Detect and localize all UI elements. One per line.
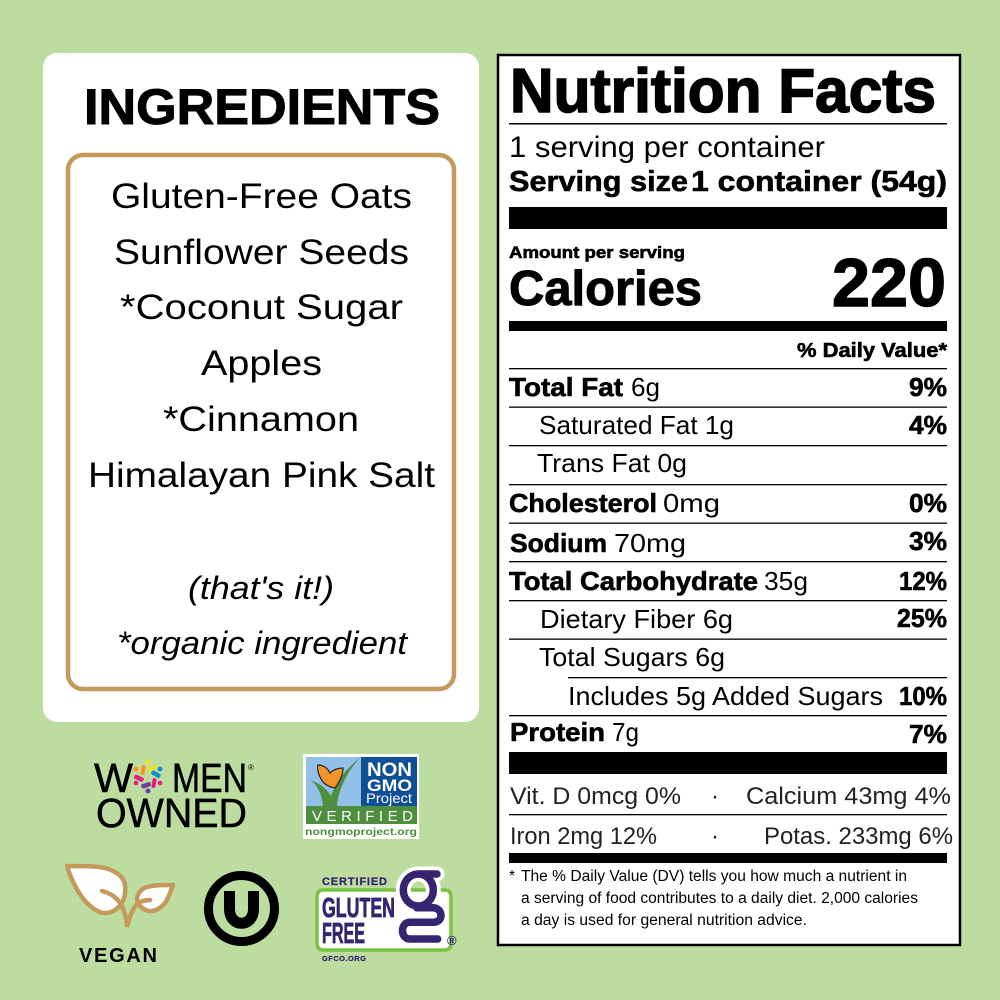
badge: non gmo project verified: GMO — [367, 776, 412, 795]
vitamins and minerals: Vit. D 0mcg 0% — [510, 783, 681, 810]
ingredient list: *Coconut Sugar — [120, 288, 403, 327]
badge: vegan: VEGAN — [79, 945, 157, 967]
row: total fat: Total Fat — [509, 372, 623, 402]
row: sodium: 3% — [909, 526, 947, 556]
ingredient list — [88, 177, 435, 495]
vitamins and minerals: · — [711, 783, 719, 810]
ingredients box — [68, 155, 454, 689]
footnote: * — [509, 868, 515, 885]
servings info — [509, 131, 947, 198]
row: total carbohydrate: 35g — [764, 566, 808, 596]
badge: kosher U — [208, 876, 274, 942]
servings info: Serving size — [509, 166, 688, 198]
badge: non gmo project verified: NON — [367, 760, 412, 781]
servings info: 1 serving per container — [509, 131, 825, 164]
row: saturated fat — [539, 410, 947, 440]
row: cholesterol — [509, 488, 947, 518]
badge: women owned: OWNED — [96, 790, 247, 836]
row: trans fat: Trans Fat 0g — [537, 448, 687, 478]
vitamins and minerals: Iron 2mg 12% — [510, 823, 657, 850]
calories — [509, 243, 946, 321]
footnote: a serving of food contributes to a daily diet. 2,000 calories — [521, 890, 918, 907]
icon: g logo — [402, 874, 441, 939]
row: sodium: 70mg — [614, 528, 686, 558]
badge: vegan — [67, 866, 173, 967]
badge: certified gluten free: CERTIFIED — [322, 876, 387, 888]
ingredient list: Sunflower Seeds — [114, 233, 409, 272]
vitamins and minerals: Calcium 43mg 4% — [746, 783, 951, 810]
row: total carbohydrate: Total Carbohydrate — [509, 566, 758, 596]
footnote: The % Daily Value (DV) tells you how much a nutrient in — [521, 868, 907, 885]
heading: ingredients: INGREDIENTS — [84, 79, 440, 135]
badge: non gmo project verified: nongmoproject.org — [305, 826, 417, 838]
row: total fat: 6g — [631, 372, 660, 402]
calories: Amount per serving — [509, 243, 685, 262]
row: total fat: 9% — [909, 372, 947, 402]
row: protein: Protein — [510, 717, 605, 747]
row: added sugars: 10% — [899, 681, 947, 711]
row: dietary fiber: Dietary Fiber 6g — [540, 604, 733, 634]
badge: certified gluten free — [317, 874, 457, 963]
badge: women owned: ® — [248, 763, 254, 772]
badge: women owned: W — [94, 755, 133, 801]
calories: 220 — [832, 245, 946, 321]
row: protein — [510, 717, 947, 749]
row: total carbohydrate: 12% — [899, 566, 947, 596]
ingredient list: Gluten-Free Oats — [111, 177, 412, 216]
ingredient list: *Cinnamon — [163, 400, 359, 439]
row: total carbohydrate — [509, 566, 947, 596]
row: sodium — [510, 526, 947, 558]
footnote — [509, 868, 918, 929]
row: added sugars: Includes 5g Added Sugars — [568, 681, 883, 711]
vitamins and minerals — [509, 783, 953, 850]
row: sodium: Sodium — [510, 528, 607, 558]
calories: Calories — [509, 262, 702, 316]
servings info: 1 container (54g) — [691, 166, 947, 198]
panel: nutrition facts — [498, 55, 960, 945]
daily value header: % Daily Value* — [797, 340, 947, 362]
badge: non gmo project verified: Project — [366, 790, 412, 806]
badge: non gmo project verified: VERIFIED — [312, 808, 413, 825]
vitamins and minerals: Potas. 233mg 6% — [764, 823, 953, 850]
row: protein: 7% — [909, 719, 947, 749]
ingredient list: Apples — [201, 344, 322, 383]
panel: ingredients — [43, 53, 479, 722]
ingredient list: Himalayan Pink Salt — [88, 456, 435, 495]
row: dietary fiber: 25% — [897, 603, 947, 633]
badge: certified gluten free: FREE — [322, 918, 365, 950]
badge: women owned: MEN — [172, 755, 247, 801]
row: cholesterol: 0mg — [663, 488, 720, 518]
row: saturated fat: Saturated Fat 1g — [539, 410, 734, 440]
badge: certified gluten free: ® — [447, 933, 457, 948]
row: dietary fiber — [540, 603, 947, 634]
row: total sugars: Total Sugars 6g — [539, 642, 725, 672]
badge: non gmo project verified — [303, 754, 419, 839]
row: total fat — [509, 372, 947, 402]
row: protein: 7g — [612, 717, 639, 747]
vitamins and minerals: · — [711, 823, 719, 850]
row: cholesterol: 0% — [909, 488, 947, 518]
footnote: a day is used for general nutrition advice. — [521, 912, 807, 929]
row: cholesterol: Cholesterol — [509, 488, 657, 518]
nutrient rows — [509, 368, 947, 749]
note: organic ingredient: *organic ingredient — [117, 625, 408, 661]
badge: certified gluten free: GFCO.ORG — [322, 954, 366, 963]
title: nutrition facts: Nutrition Facts — [510, 57, 936, 126]
badge: women owned — [94, 755, 254, 836]
badge: certified gluten free: GLUTEN — [322, 892, 395, 923]
note: that's it: (that's it!) — [188, 570, 334, 606]
row: saturated fat: 4% — [909, 410, 947, 440]
